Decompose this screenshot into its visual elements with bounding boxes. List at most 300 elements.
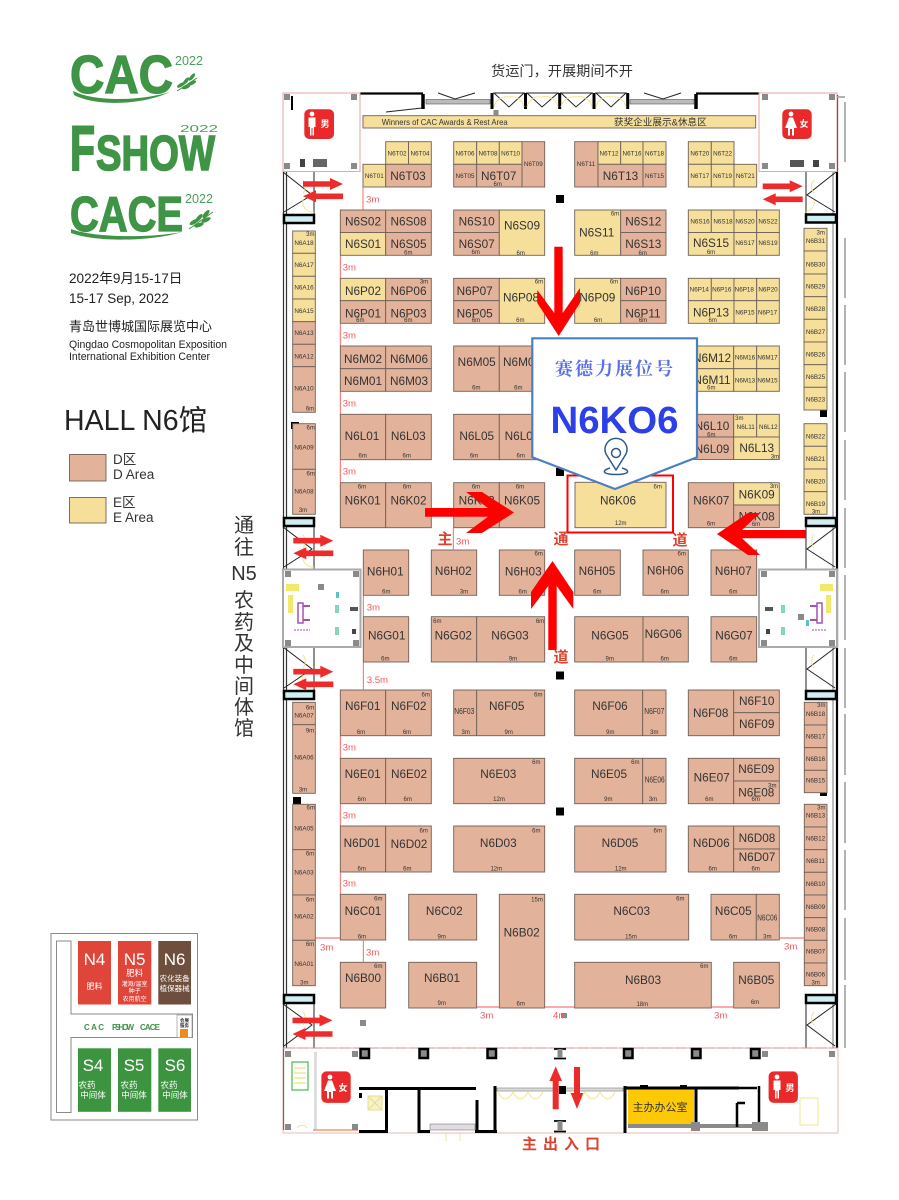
booth N6T07: N6T07 [481, 169, 516, 183]
booth N6L05: 6m [470, 454, 478, 460]
right column booth N6B13: 3m [817, 805, 825, 811]
booth N6P09: 6m [610, 280, 618, 286]
mini hall S5: 农药 [120, 1080, 138, 1090]
booth N6P16: N6P16 [712, 287, 732, 294]
booth N6F05: 9m [505, 730, 513, 736]
right column booth N6B15 [804, 770, 827, 793]
booth N6G07 [711, 617, 757, 663]
booth N6E09 [734, 758, 779, 781]
booth N6T22 [711, 142, 734, 164]
hall structure: walls and doors [283, 93, 845, 1130]
mini logos and service box: FSHOW [112, 1023, 134, 1032]
booth N6S13: N6S13 [625, 237, 662, 251]
booth N6E03: 6m [532, 760, 540, 766]
booth N6H05: N6H05 [579, 564, 616, 578]
booth N6T04: N6T04 [411, 150, 430, 158]
booth N6H03: N6H03 [505, 564, 542, 578]
booth N6P07: N6P07 [457, 284, 493, 298]
booth N6K02: 6m [403, 485, 411, 491]
booth N6C03: 6m [676, 897, 684, 903]
booth N6B03 [575, 962, 711, 1008]
booth N6B02: 15m [531, 897, 543, 903]
vertical label: way to N5 [231, 514, 257, 740]
booth N6K05 [499, 483, 545, 528]
booth N6B03: N6B03 [625, 973, 661, 987]
booth N6P03 [386, 301, 431, 324]
booth N6E05: 6m [631, 760, 639, 766]
booth N6S19: N6S19 [758, 240, 778, 247]
right column booth N6B19: N6B19 [806, 501, 826, 508]
booth N6G01: 6m [381, 657, 389, 663]
booth N6S02 [340, 210, 386, 232]
booth N6P07 [454, 278, 499, 301]
mini logos and service box [84, 1015, 192, 1038]
booth N6S15: N6S15 [693, 236, 729, 250]
vertical label: way to N5: 农 [234, 589, 254, 612]
left column booth N6A15: N6A15 [294, 308, 314, 315]
booth N6S17: N6S17 [735, 240, 755, 247]
entrance in and out arrows [549, 1066, 583, 1109]
booth N6K06 highlighted: 12m [615, 521, 627, 527]
icon: entrance men's room: 男 [785, 1083, 795, 1093]
booth N6D08: N6D08 [739, 831, 776, 845]
booth N6S05: N6S05 [390, 237, 427, 251]
logo: FSHOW 2022 [70, 114, 219, 184]
booth N6S18 [711, 210, 734, 232]
right column booth N6B17: N6B17 [806, 734, 826, 741]
booth N6G03 [477, 617, 545, 663]
aisle width dimensions: 3m [366, 948, 379, 958]
booth N6G06 [643, 617, 688, 663]
booth N6L10: N6L10 [695, 419, 730, 433]
booth N6D02 [386, 826, 431, 872]
event date and venue: 15-17 Sep, 2022 [69, 291, 169, 306]
booth N6M11: N6M11 [693, 373, 731, 387]
booth N6K01: 6m [358, 485, 366, 491]
right column booth N6B20 [804, 469, 827, 492]
booth N6K05: 6m [516, 485, 524, 491]
booth N6D01 [340, 826, 386, 872]
mini logos and service box: CAC [84, 1023, 104, 1032]
event date and venue: 2022年9月15-17日 [69, 271, 182, 286]
left column booth N6A08: 6m [307, 472, 315, 478]
booth N6M07: N6M07 [503, 355, 541, 369]
booth N6E07: 6m [705, 797, 713, 803]
right column booth N6B11: N6B11 [806, 858, 825, 865]
booth N6S19 [757, 232, 779, 255]
booth N6P13 [688, 301, 734, 324]
right column booth N6B09 [804, 895, 827, 918]
booth N6P17: N6P17 [758, 310, 778, 317]
vertical label: way to N5: 通 [234, 514, 254, 537]
booth N6P18: N6P18 [735, 287, 754, 294]
booth N6T01 [363, 164, 386, 187]
booth N6K05: N6K05 [504, 494, 540, 508]
booth N6M11: 6m [707, 386, 715, 392]
booth N6F01: N6F01 [345, 699, 380, 713]
left column booth N6A13: N6A13 [294, 330, 314, 337]
booth N6F02: 6m [403, 730, 411, 736]
booth N6S20 [734, 210, 757, 232]
left column booth N6A18 [293, 231, 315, 253]
left column booth N6A07 [293, 702, 315, 725]
left column booth N6A08: 3m [299, 508, 307, 514]
left stair block [283, 570, 360, 647]
left column booth N6A15 [293, 299, 315, 322]
booth N6S22 [757, 210, 779, 232]
right column booth N6B16 [804, 748, 827, 770]
booth N6K02: N6K02 [390, 494, 427, 508]
mini hall N5: 农用航空 [123, 995, 147, 1003]
booth N6D06: 6m [709, 866, 717, 872]
booth N6S08: N6S08 [390, 214, 427, 228]
mini hall N5: 肥料 [126, 968, 144, 978]
booth N6D01: N6D01 [344, 836, 380, 850]
booth N6H05 [575, 550, 620, 596]
booth N6L01 [340, 414, 386, 460]
booth N6F09: N6F09 [739, 717, 774, 731]
booth N6G05: N6G05 [591, 628, 629, 642]
booth N6S15 [688, 232, 734, 256]
booth N6E05: N6E05 [591, 767, 627, 781]
left column booth N6A18: N6A18 [294, 240, 314, 247]
booth N6D05: 12m [615, 866, 627, 872]
booth N6K06 highlighted: N6K06 [600, 494, 636, 508]
booth N6S07: N6S07 [459, 237, 495, 251]
booth N6M03: N6M03 [390, 374, 428, 388]
booth N6L10: 6m [707, 433, 715, 439]
mini logos and service box: CACE [140, 1023, 161, 1032]
right column booth N6B16: N6B16 [806, 756, 826, 763]
icon: entrance men's room [769, 1071, 798, 1103]
booth N6C05 [711, 894, 756, 940]
booth N6C01: 6m [358, 934, 366, 940]
booth N6C03 [575, 894, 689, 940]
booth N6G05 [575, 617, 643, 663]
booth N6G01: N6G01 [368, 628, 405, 642]
booth N6H05: 6m [593, 590, 601, 596]
booth N6H06: 6m [661, 590, 669, 596]
right column booth N6B30: N6B30 [806, 261, 826, 268]
booth N6H06: 6m [678, 552, 686, 558]
booth N6L09 [688, 437, 734, 460]
booth N6F05: 6m [534, 692, 542, 698]
booth N6T16 [621, 142, 643, 164]
left column booth N6A03: 6m [306, 851, 314, 857]
left column booth N6A06: N6A06 [294, 754, 314, 761]
right column booth N6B25: N6B25 [806, 374, 826, 381]
booth N6H07: 6m [729, 590, 737, 596]
booth N6P06: 3m [420, 280, 428, 286]
booth N6T01: N6T01 [365, 173, 384, 180]
structural columns [360, 1049, 760, 1058]
booth N6T20 [688, 142, 711, 164]
main aisle labels: 道 [672, 531, 688, 549]
booth N6L05: N6L05 [459, 429, 495, 443]
booth N6M13: N6M13 [735, 377, 756, 384]
booth N6K08 [734, 505, 779, 528]
right column booth N6B06: N6B06 [806, 972, 826, 979]
booth N6P20 [757, 278, 779, 301]
mini hall S6: S6 [165, 1056, 185, 1075]
booth N6T12: N6T12 [600, 150, 619, 158]
booth N6T18: N6T18 [645, 150, 664, 158]
callout: Sedeli booth number: N6KO6 [550, 399, 679, 442]
booth N6F06: 9m [606, 730, 614, 736]
booth N6P15 [734, 301, 757, 323]
black support columns [291, 195, 827, 816]
booth N6K01: N6K01 [345, 494, 381, 508]
booth N6S05 [386, 232, 431, 256]
booth N6F03 [454, 690, 477, 736]
booth N6P05 [454, 301, 499, 324]
left column booth N6A03: N6A03 [294, 870, 314, 877]
booth N6B00: N6B00 [345, 971, 381, 985]
legend: D area and E area: D区 [113, 452, 136, 467]
icon: location pin [604, 438, 628, 474]
right column booth N6B18 [804, 702, 827, 725]
mini hall S6 [158, 1048, 191, 1112]
left column booth N6A01: 3m [300, 981, 308, 987]
booth N6P13: N6P13 [693, 305, 729, 319]
booth N6K03: 6m [472, 485, 480, 491]
main aisle labels: 主 [437, 530, 453, 548]
booth N6L07: 6m [517, 454, 525, 460]
booth N6M05: 6m [472, 386, 480, 392]
booth N6C01: N6C01 [345, 904, 381, 918]
main entrance label: 主出入口 [522, 1135, 606, 1153]
left column booth N6A05: 6m [307, 805, 315, 811]
booth N6D06: N6D06 [693, 836, 730, 850]
booth N6S02: N6S02 [345, 214, 381, 228]
booth N6S10: N6S10 [459, 214, 495, 228]
left column booth N6A07: 6m [306, 705, 314, 711]
booth N6P09: N6P09 [579, 290, 615, 304]
booth N6K06 highlighted: 6m [654, 485, 662, 491]
booth N6S12: N6S12 [625, 214, 661, 228]
booth N6C02 [409, 894, 477, 940]
aisle width dimensions: 3m [343, 466, 356, 478]
booth N6M15: N6M15 [757, 377, 778, 384]
left column booth N6A02: N6A02 [294, 913, 314, 920]
awards and rest area banner: 获奖企业展示&休息区 [614, 116, 707, 128]
booth N6P09 [575, 278, 621, 324]
mini hall N5: 灌溉/温室 [122, 980, 147, 988]
vertical label: way to N5: 及 [234, 633, 254, 655]
right column booth N6B17 [804, 725, 827, 748]
event date and venue: 青岛世博城国际展览中心 [69, 319, 212, 334]
booth N6H03 [499, 550, 545, 596]
booth N6C05: 6m [729, 934, 737, 940]
aisle width dimensions: 4m [553, 1010, 566, 1022]
booth N6M06 [386, 346, 431, 369]
highlight frame around booth N6K06 [568, 476, 673, 532]
mini hall N4: N4 [84, 950, 105, 969]
booth N6T15 [643, 164, 666, 187]
booth N6T19: N6T19 [713, 173, 733, 180]
booth N6S13 [621, 232, 666, 257]
booth N6T07 [477, 164, 522, 188]
booth N6K06 highlighted [575, 482, 666, 528]
booth N6F08 [688, 690, 734, 736]
booth N6B05: N6B05 [738, 973, 775, 987]
booth N6E09: N6E09 [738, 762, 774, 776]
booth N6S11: 6m [611, 212, 619, 218]
left column booth N6A06 [293, 725, 315, 793]
booth N6T16: N6T16 [623, 150, 642, 158]
top-left men's room [283, 93, 360, 172]
right column booth N6B31: 3m [817, 231, 825, 237]
booth N6F08: N6F08 [693, 706, 729, 720]
booth N6T15: N6T15 [645, 173, 664, 180]
booth N6T13: N6T13 [603, 169, 639, 183]
booth N6B01: 9m [438, 1001, 446, 1007]
booth N6F02: 6m [422, 692, 430, 698]
aisle width dimensions: 3m [320, 942, 333, 954]
right column booth N6B07 [804, 940, 827, 963]
booth N6G02 [431, 617, 477, 662]
inner walls [359, 1086, 623, 1141]
booth N6S22: N6S22 [758, 218, 778, 225]
left column booth N6A05 [293, 804, 315, 850]
logo: FSHOW 2022: 2022 [180, 124, 219, 135]
booth N6M12 [688, 346, 734, 369]
booth N6G07: N6G07 [715, 628, 753, 642]
booth N6T21: N6T21 [736, 173, 755, 180]
mini hall N5: N5 [124, 950, 145, 969]
booth N6L07 [499, 414, 545, 460]
icon: entrance women's room: 女 [338, 1082, 348, 1093]
main aisle labels [437, 530, 688, 666]
right column booth N6B28: N6B28 [806, 306, 826, 313]
left column booth N6A01: 6m [306, 942, 314, 948]
booth N6K08: 6m [752, 522, 760, 528]
mini hall S4 [78, 1048, 111, 1112]
booth N6D03: 12m [490, 866, 502, 872]
booth N6M01: N6M01 [344, 374, 382, 388]
booth N6H02 [431, 550, 477, 596]
booth N6C03: 15m [625, 934, 637, 940]
logo: CAC 2022: 2022 [175, 54, 203, 68]
booth N6E03 [454, 758, 545, 804]
booth N6K03 [454, 483, 499, 528]
booth N6P14: N6P14 [690, 287, 709, 294]
booth N6S16: N6S16 [690, 218, 710, 225]
mini hall S6: 农药 [160, 1080, 178, 1090]
booth N6E07: N6E07 [694, 770, 730, 784]
booth N6P03: N6P03 [390, 306, 427, 320]
aisle width dimensions: 3m [714, 1010, 727, 1022]
right column booth N6B12 [804, 827, 827, 850]
right column booth N6B21: N6B21 [806, 456, 826, 463]
left column booth N6A07: N6A07 [294, 713, 314, 720]
booth N6T22: N6T22 [713, 150, 733, 158]
booth N6C06 [756, 894, 779, 940]
booth N6L05 [454, 414, 499, 460]
mini hall S5: S5 [124, 1056, 144, 1075]
booth N6P11: 6m [639, 318, 647, 324]
booth N6S13: 6m [639, 251, 647, 257]
booth N6D03: N6D03 [480, 836, 517, 850]
booth N6E01 [340, 758, 386, 804]
wall window blocks [284, 214, 836, 1003]
booth N6K09: N6K09 [739, 488, 775, 502]
aisle width dimensions: 3m [456, 536, 469, 548]
booth N6F05: N6F05 [489, 699, 525, 713]
booth N6L03 [386, 414, 431, 460]
booth N6S20: N6S20 [735, 218, 755, 225]
booth N6K07: N6K07 [693, 494, 729, 508]
right column booth N6B30 [804, 251, 827, 274]
booth N6M11 [688, 369, 734, 392]
logo: CACE 2022: CACE [70, 188, 183, 242]
legend: D area and E area: E区 [113, 495, 136, 510]
booth N6K07 [688, 483, 734, 528]
booth N6D05 [575, 826, 666, 872]
booth N6D07: 6m [752, 866, 760, 872]
mini hall N4 [78, 941, 111, 1004]
big red arrow from the right [717, 513, 806, 555]
right column booth N6B29: N6B29 [806, 283, 826, 290]
vertical label: way to N5: 体 [234, 696, 254, 719]
right column booth N6B18: 3m [817, 703, 825, 709]
right column booth N6B21 [804, 446, 827, 469]
booth N6L13: 3m [771, 455, 779, 461]
aisle width dimensions: 3m [366, 194, 379, 206]
booth N6T03: N6T03 [390, 169, 426, 183]
booth N6M02: N6M02 [344, 352, 382, 366]
booth N6P10 [621, 278, 666, 301]
booth N6H02: 3m [460, 590, 468, 596]
booth N6C02: 9m [438, 934, 446, 940]
booth N6D01: 6m [358, 866, 366, 872]
booth N6S07 [454, 232, 499, 256]
booth N6P05: 6m [472, 318, 480, 324]
aisle width dimensions [316, 187, 804, 1022]
booth N6M02 [340, 346, 386, 369]
booth N6S01 [340, 232, 386, 255]
aisle width dimensions: 3m [343, 878, 356, 890]
booth N6F01: 6m [357, 730, 365, 736]
booth N6M17: N6M17 [757, 355, 778, 362]
mini hall S5 [118, 1048, 151, 1112]
mini map of halls [51, 934, 198, 1120]
booth N6E06: 3m [649, 797, 657, 803]
booth N6P08: N6P08 [503, 290, 539, 304]
booth N6F07: 3m [650, 730, 658, 736]
booth N6C06: N6C06 [757, 914, 778, 922]
booth N6G05: 9m [606, 657, 614, 663]
booth N6B03: 6m [700, 964, 708, 970]
booth N6P18 [734, 278, 757, 301]
right column booth N6B27 [804, 319, 827, 342]
left column booth N6A12 [293, 344, 315, 367]
booth N6D06 [688, 826, 734, 872]
booth N6G07: 6m [729, 657, 737, 663]
booth N6S09: 6m [517, 251, 525, 257]
booth N6M05 [454, 346, 499, 392]
booth N6D03 [454, 826, 545, 872]
left column booth N6A10: 6m [306, 406, 314, 412]
booth N6M05: N6M05 [458, 355, 496, 369]
vertical label: way to N5: N5 [231, 563, 257, 585]
aisle width dimensions: 3m [343, 330, 356, 342]
booth N6E03: N6E03 [480, 767, 517, 781]
vertical label: way to N5: 间 [234, 675, 254, 698]
booth N6M15 [757, 369, 779, 391]
booth N6P17 [757, 301, 779, 323]
small red traffic arrows [292, 178, 803, 1040]
